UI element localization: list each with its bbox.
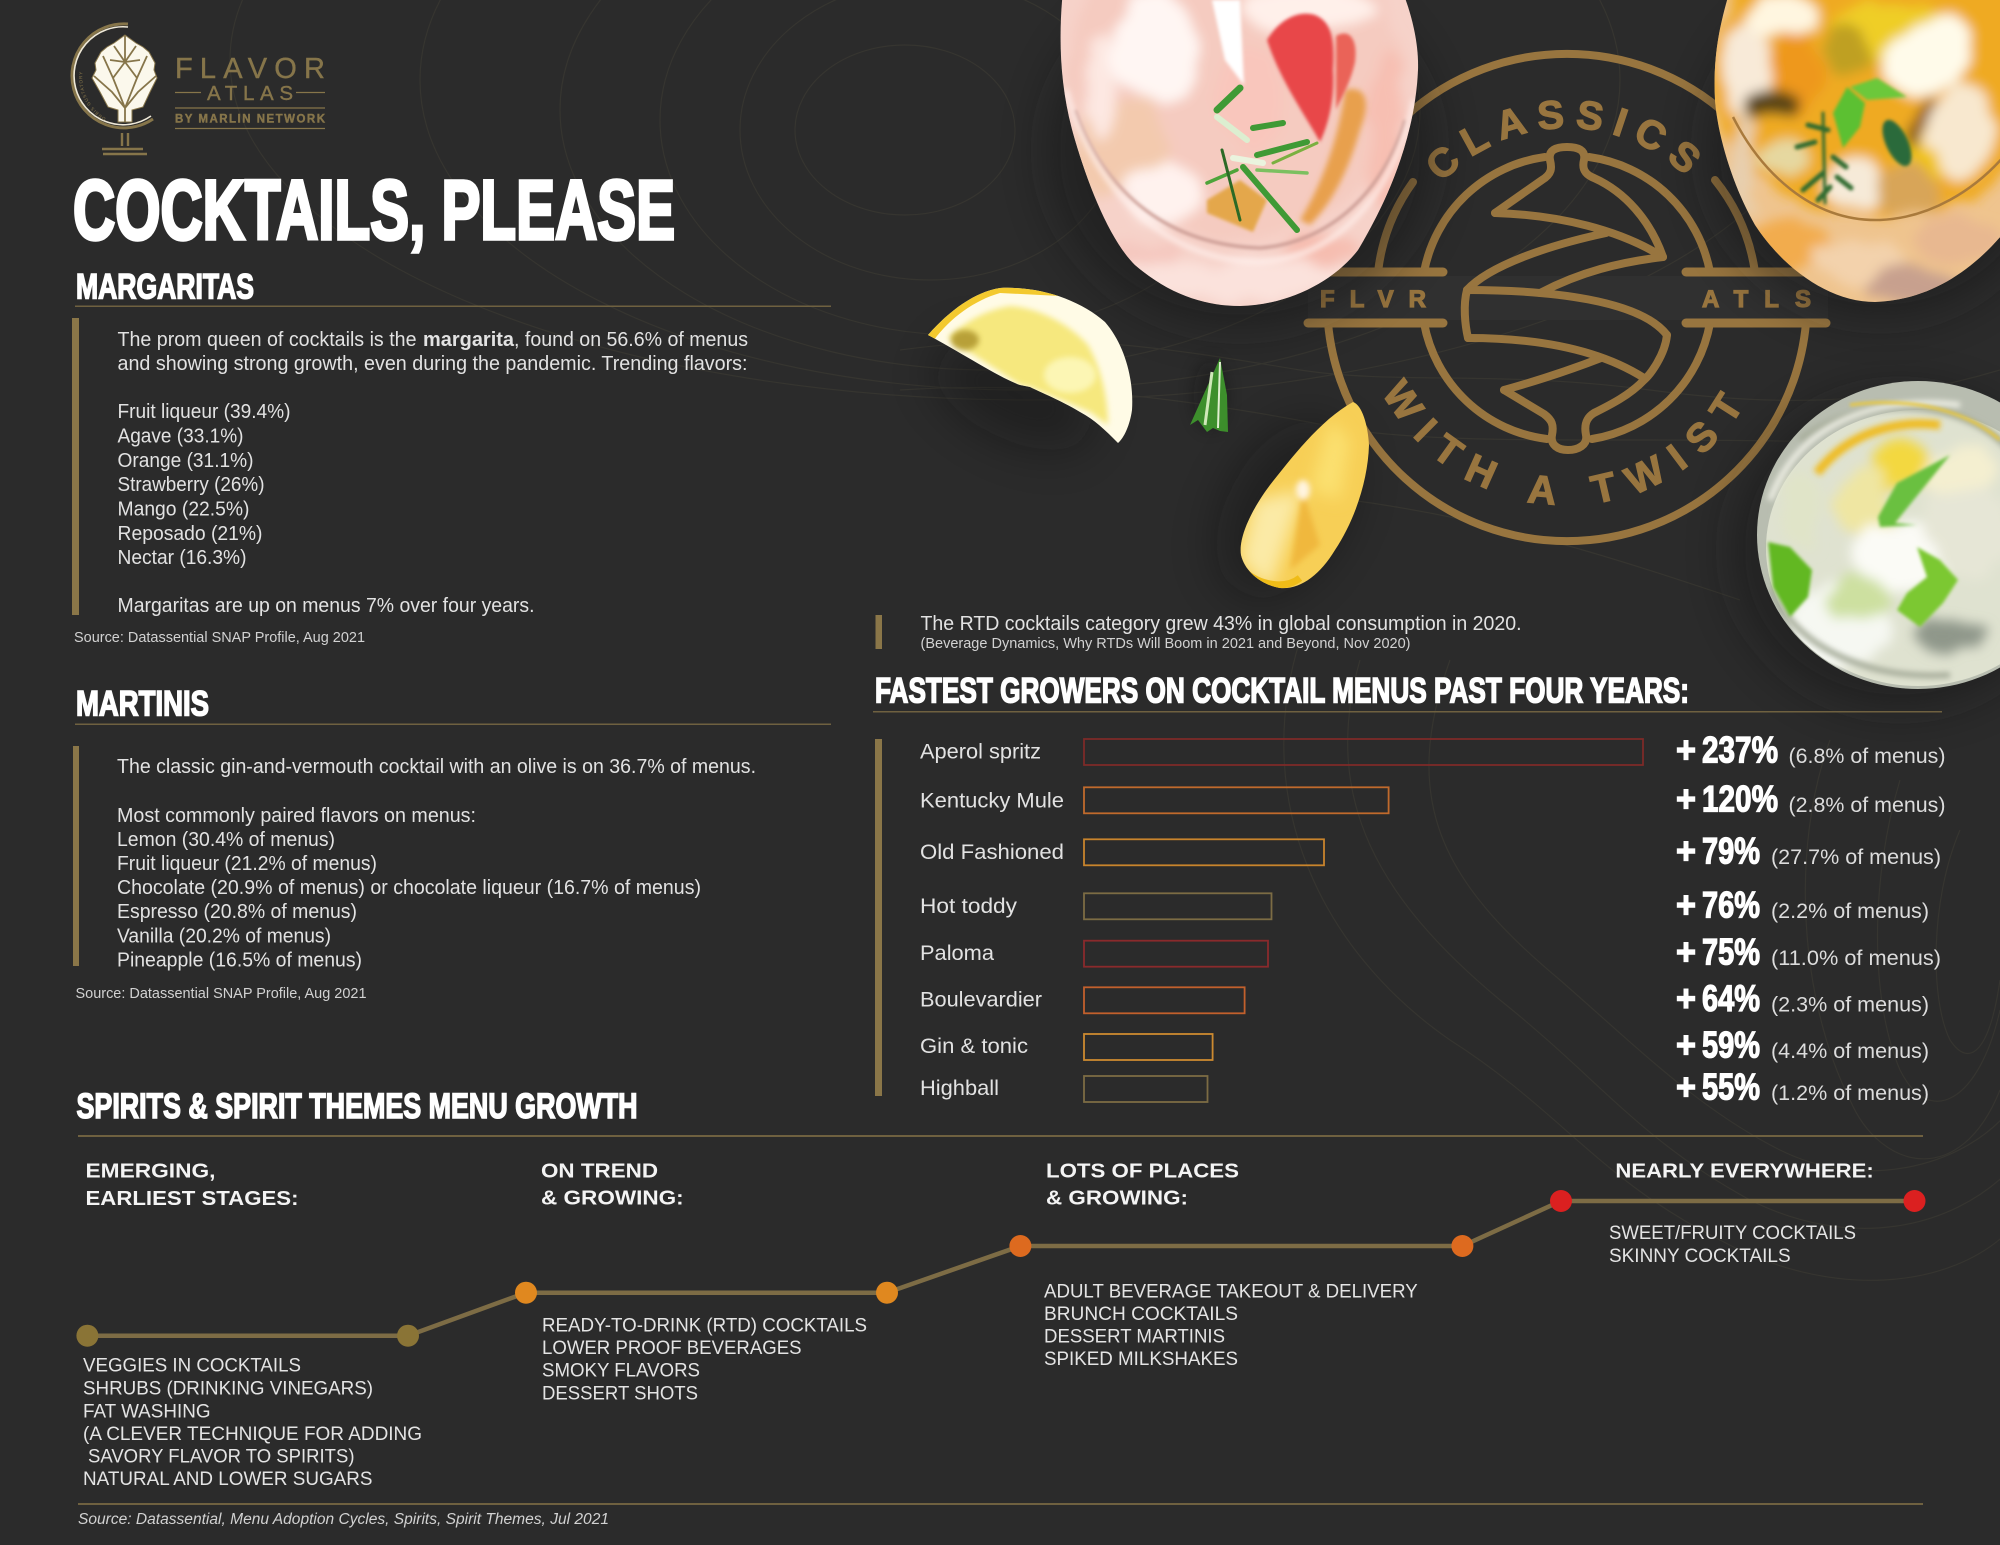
rosemary sprig	[1207, 88, 1317, 230]
bar: Aperol spritz	[920, 730, 1946, 771]
icon: artichoke globe: ORBIS GUSTATORY	[79, 72, 106, 120]
bar: Highball: +	[1676, 1066, 1696, 1107]
list: paired flavors: Lemon (30.4% of menus)	[117, 828, 335, 851]
bar: Kentucky Mule: 120%	[1702, 779, 1778, 820]
bar: Old Fashioned: +	[1676, 830, 1696, 871]
panel: margaritas	[72, 266, 831, 646]
bar: Paloma: 75%	[1702, 931, 1760, 972]
bar: Boulevardier: +	[1676, 978, 1696, 1019]
bar: Highball: 55%	[1702, 1066, 1760, 1107]
logo wordmark: FLAVOR	[175, 53, 325, 85]
bar: Boulevardier	[920, 978, 1929, 1019]
bar: Hot toddy: (2.2% of menus)	[1771, 900, 1929, 923]
stage: on trend: LOWER PROOF BEVERAGES	[542, 1337, 802, 1359]
stage: lots of places	[1044, 1159, 1418, 1370]
stage: nearly everywhere: SWEET/FRUITY COCKTAILS	[1609, 1222, 1856, 1244]
photo: amber cocktail glass	[1700, 0, 2000, 320]
bar: Boulevardier: 64%	[1702, 978, 1760, 1019]
emblem text: FLVR	[1320, 286, 1426, 313]
text block: margarita intro: , found on 56.6% of menus	[514, 328, 748, 351]
bar: Boulevardier: Boulevardier	[920, 989, 1042, 1012]
stage: on trend: ON TREND	[541, 1160, 658, 1183]
list: trending flavors: Fruit liqueur (39.4%)	[118, 400, 290, 423]
bar: Hot toddy: Hot toddy	[920, 895, 1018, 918]
stage: on trend: & GROWING:	[541, 1186, 684, 1209]
chart: adoption timeline	[76, 1190, 1925, 1347]
text block: margarita intro: margarita	[423, 328, 515, 351]
emblem text: WITH A TWIST	[1384, 376, 1740, 506]
stage: emerging: VEGGIES IN COCKTAILS	[83, 1355, 301, 1377]
band plate	[1308, 276, 1828, 320]
bar: Gin and tonic: (4.4% of menus)	[1771, 1040, 1929, 1063]
bar: Kentucky Mule: Kentucky Mule	[920, 790, 1064, 812]
stage: lots of places: BRUNCH COCKTAILS	[1044, 1303, 1238, 1325]
stage: emerging: NATURAL AND LOWER SUGARS	[83, 1468, 372, 1490]
stage: on trend	[541, 1160, 867, 1404]
bar: Kentucky Mule	[920, 779, 1946, 820]
heading: martinis: MARTINIS	[76, 684, 209, 724]
bar: Hot toddy: +	[1676, 885, 1696, 926]
bar: Paloma: (11.0% of menus)	[1771, 947, 1941, 970]
list: trending flavors: Nectar (16.3%)	[118, 546, 246, 569]
background topographic contours	[230, 0, 2000, 1280]
stage: nearly everywhere: NEARLY EVERYWHERE:	[1615, 1159, 1874, 1182]
stage: emerging: EARLIEST STAGES:	[86, 1187, 298, 1210]
list: trending flavors: Agave (33.1%)	[118, 424, 244, 448]
panel: martinis	[73, 684, 831, 1002]
icon: twisted lemon peel	[1465, 147, 1667, 450]
text block: margarita intro: The prom queen of cocktails is the	[118, 328, 416, 351]
photo: lemon wedge left	[928, 288, 1132, 443]
stage: emerging: (A CLEVER TECHNIQUE FOR ADDING	[83, 1423, 422, 1445]
stage: emerging	[83, 1160, 422, 1490]
bar: Boulevardier: (2.3% of menus)	[1771, 994, 1929, 1016]
bar: Highball: Highball	[920, 1077, 999, 1100]
bar: Gin and tonic: +	[1676, 1025, 1696, 1066]
bar: Old Fashioned: 79%	[1702, 830, 1760, 871]
heading: spirits menu growth: SPIRITS & SPIRIT THEMES MENU GROWTH	[76, 1086, 638, 1126]
callout: RTD growth: The RTD cocktails category grew 43% in global consumption in 2020.	[920, 612, 1522, 635]
stage: emerging: SAVORY FLAVOR TO SPIRITS)	[88, 1446, 354, 1468]
list: trending flavors: Reposado (21%)	[118, 522, 262, 545]
source: menu adoption cycles: Source: Datassential, Menu Adoption Cycles, Spirits, Spirit Themes, Jul 2021	[78, 1511, 609, 1528]
heading: fastest growers: FASTEST GROWERS ON COCKTAIL MENUS PAST FOUR YEARS:	[875, 670, 1689, 710]
bar: Hot toddy	[920, 885, 1929, 926]
text block: margarita growth: Margaritas are up on menus 7% over four years.	[118, 594, 534, 617]
text block: martini intro: The classic gin-and-vermouth cocktail with an olive is on 36.7% of menus.	[117, 755, 756, 778]
stage: on trend: SMOKY FLAVORS	[542, 1360, 700, 1382]
photo: lime and mint cocktail glass	[1730, 381, 2000, 710]
mint leaves and thyme	[1797, 78, 1918, 203]
bar: Old Fashioned: Old Fashioned	[920, 841, 1064, 864]
list: paired flavors: Espresso (20.8% of menus)	[117, 900, 357, 923]
stage: nearly everywhere: SKINNY COCKTAILS	[1609, 1245, 1791, 1267]
bar: Paloma: +	[1676, 931, 1696, 972]
list: trending flavors: Mango (22.5%)	[118, 498, 250, 520]
source: margaritas: Source: Datassential SNAP Profile, Aug 2021	[74, 629, 365, 646]
bar: Kentucky Mule: +	[1676, 779, 1696, 820]
logo wordmark: ATLAS	[207, 82, 293, 105]
stage: lots of places: LOTS OF PLACES	[1046, 1159, 1239, 1182]
bar: Kentucky Mule: (2.8% of menus)	[1788, 794, 1946, 817]
logo wordmark	[175, 53, 326, 128]
text block: margarita intro: and showing strong growth, even during the pandemic. Trending flavors:	[118, 352, 748, 375]
list: paired flavors: Most commonly paired flavors on menus:	[117, 804, 476, 827]
stage: lots of places: ADULT BEVERAGE TAKEOUT & DELIVERY	[1044, 1280, 1418, 1302]
stage: nearly everywhere	[1609, 1159, 1874, 1267]
bar: Hot toddy: 76%	[1702, 885, 1760, 926]
emblem text	[1320, 100, 1811, 506]
list: trending flavors: Orange (31.1%)	[118, 449, 254, 472]
photo: pink grapefruit cocktail glass	[1040, 0, 1440, 330]
bar: Old Fashioned	[920, 830, 1941, 871]
stage: on trend: DESSERT SHOTS	[542, 1382, 698, 1404]
icon: artichoke globe	[70, 22, 158, 156]
heading: margaritas: MARGARITAS	[76, 266, 254, 306]
callout: RTD growth	[876, 612, 1522, 652]
stage: on trend: READY-TO-DRINK (RTD) COCKTAILS	[542, 1315, 867, 1337]
panel: fastest growers bar chart	[873, 670, 1946, 1107]
title: COCKTAILS, PLEASE	[73, 163, 675, 257]
callout: RTD growth: (Beverage Dynamics, Why RTDs Will Boom in 2021 and Beyond, Nov 2020)	[920, 635, 1411, 652]
list: trending flavors: Strawberry (26%)	[118, 473, 264, 496]
stage: lots of places: DESSERT MARTINIS	[1044, 1326, 1225, 1348]
bar: Highball	[920, 1066, 1929, 1107]
stage: emerging: SHRUBS (DRINKING VINEGARS)	[83, 1377, 373, 1399]
mint leaves	[1768, 455, 1958, 627]
emblem text: CLASSICS	[1428, 100, 1700, 178]
stage: lots of places: SPIKED MILKSHAKES	[1044, 1348, 1238, 1370]
list: trending flavors	[118, 400, 290, 569]
list: paired flavors: Chocolate (20.9% of menus) or chocolate liqueur (16.7% of menus)	[117, 876, 701, 899]
emblem rings	[1308, 54, 1826, 541]
bar: Highball: (1.2% of menus)	[1771, 1082, 1929, 1105]
text block: margarita intro	[118, 328, 748, 375]
stage: lots of places: & GROWING:	[1046, 1187, 1188, 1210]
emblem text: ATLS	[1702, 286, 1811, 313]
list: paired flavors: Vanilla (20.2% of menus)	[117, 924, 331, 948]
bar: Gin and tonic	[920, 1025, 1929, 1066]
emblem: classics with a twist	[1304, 50, 1830, 546]
bar: Gin and tonic: Gin & tonic	[920, 1035, 1028, 1058]
list: paired flavors: Pineapple (16.5% of menus)	[117, 948, 362, 972]
stage: emerging: FAT WASHING	[83, 1400, 210, 1422]
list: paired flavors	[117, 804, 701, 972]
bar: Aperol spritz: (6.8% of menus)	[1788, 745, 1946, 768]
stage: emerging: EMERGING,	[86, 1160, 216, 1183]
list: paired flavors: Fruit liqueur (21.2% of menus)	[117, 852, 377, 875]
photo: lemon wedge right	[1238, 402, 1369, 588]
bar: Aperol spritz: 237%	[1702, 730, 1778, 771]
panel: spirits and spirit themes menu growth	[76, 1086, 1925, 1528]
source: martinis: Source: Datassential SNAP Profile, Aug 2021	[76, 985, 366, 1002]
grapefruit segment	[1267, 14, 1356, 142]
logo wordmark: BY MARLIN NETWORK	[175, 114, 326, 126]
bar: Paloma: Paloma	[920, 942, 994, 965]
logo: flavor atlas	[70, 22, 326, 156]
bar: Old Fashioned: (27.7% of menus)	[1771, 846, 1941, 869]
bar: Paloma	[920, 931, 1941, 972]
bar: Aperol spritz: Aperol spritz	[920, 740, 1041, 764]
bar: Gin and tonic: 59%	[1702, 1025, 1760, 1066]
photo: rosemary needle sprig	[1190, 358, 1228, 432]
bar: Aperol spritz: +	[1676, 730, 1696, 771]
